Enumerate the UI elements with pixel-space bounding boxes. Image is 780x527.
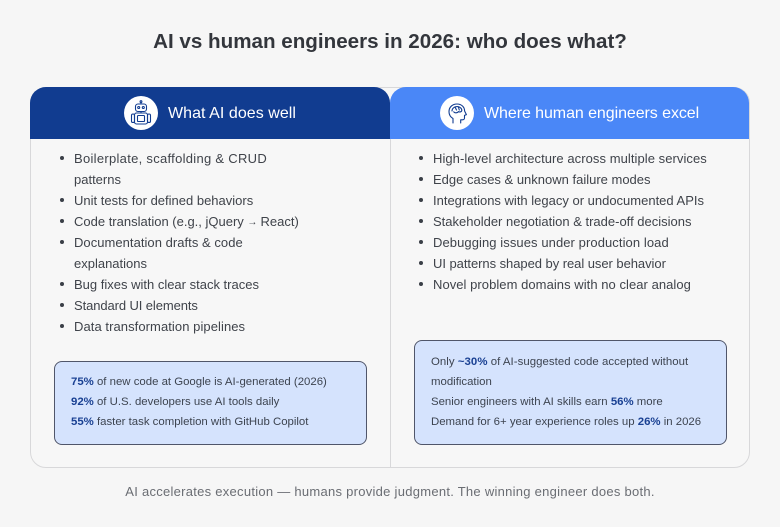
callout: human stats [414, 340, 727, 445]
stat: Senior engineers with AI skills earn 56% more [431, 396, 663, 408]
bullet [419, 261, 423, 265]
bullet [60, 156, 64, 160]
item: Integrations with legacy or undocumented APIs [433, 193, 704, 208]
title: AI vs human engineers in 2026: who does what? [153, 30, 627, 53]
icon: head with brain [440, 96, 474, 130]
item: Standard UI elements [74, 298, 198, 313]
stat: Only ~30% of AI-suggested code accepted without [431, 356, 688, 368]
stat: Demand for 6+ year experience roles up 26% in 2026 [431, 416, 701, 428]
bullet [419, 240, 423, 244]
card outline [30, 87, 750, 468]
item continuation: patterns [74, 172, 121, 187]
bullet [419, 282, 423, 286]
bullet [419, 219, 423, 223]
header label: Where human engineers excel [484, 105, 699, 122]
stat: 92% of U.S. developers use AI tools daily [71, 396, 279, 408]
item: Unit tests for defined behaviors [74, 193, 253, 208]
bullet [419, 198, 423, 202]
list: AI strengths [60, 151, 299, 334]
item: Code translation (e.g., jQuery React) [74, 214, 299, 229]
callout: AI stats [54, 361, 367, 445]
bullet [60, 303, 64, 307]
item: → [247, 217, 257, 228]
bullet [60, 240, 64, 244]
item: Boilerplate, scaffolding & CRUD [74, 151, 267, 166]
bullet [60, 282, 64, 286]
stat: 55% faster task completion with GitHub Copilot [71, 416, 308, 428]
item: Novel problem domains with no clear analog [433, 277, 691, 292]
bullet [419, 156, 423, 160]
item: Data transformation pipelines [74, 319, 245, 334]
header label: What AI does well [168, 105, 296, 122]
list: human strengths [419, 151, 707, 292]
item: Bug fixes with clear stack traces [74, 277, 259, 292]
comparison card [30, 87, 750, 468]
item: Debugging issues under production load [433, 235, 669, 250]
bullet [60, 219, 64, 223]
bullet [60, 198, 64, 202]
item: UI patterns shaped by real user behavior [433, 256, 666, 271]
footer takeaway: AI accelerates execution — humans provide judgment. The winning engineer does both. [125, 484, 655, 499]
column divider [390, 139, 391, 467]
panel header: Where human engineers excel [390, 87, 749, 139]
item: Edge cases & unknown failure modes [433, 172, 651, 187]
item continuation: explanations [74, 256, 147, 271]
stat: 75% of new code at Google is AI-generated (2026) [71, 376, 327, 388]
item: High-level architecture across multiple services [433, 151, 707, 166]
bullet [419, 177, 423, 181]
bullet [60, 324, 64, 328]
stat continuation: modification [431, 376, 492, 388]
item: Stakeholder negotiation & trade-off decisions [433, 214, 691, 229]
item: Documentation drafts & code [74, 235, 243, 250]
icon: robot [124, 96, 158, 130]
panel header: What AI does well [30, 87, 390, 139]
